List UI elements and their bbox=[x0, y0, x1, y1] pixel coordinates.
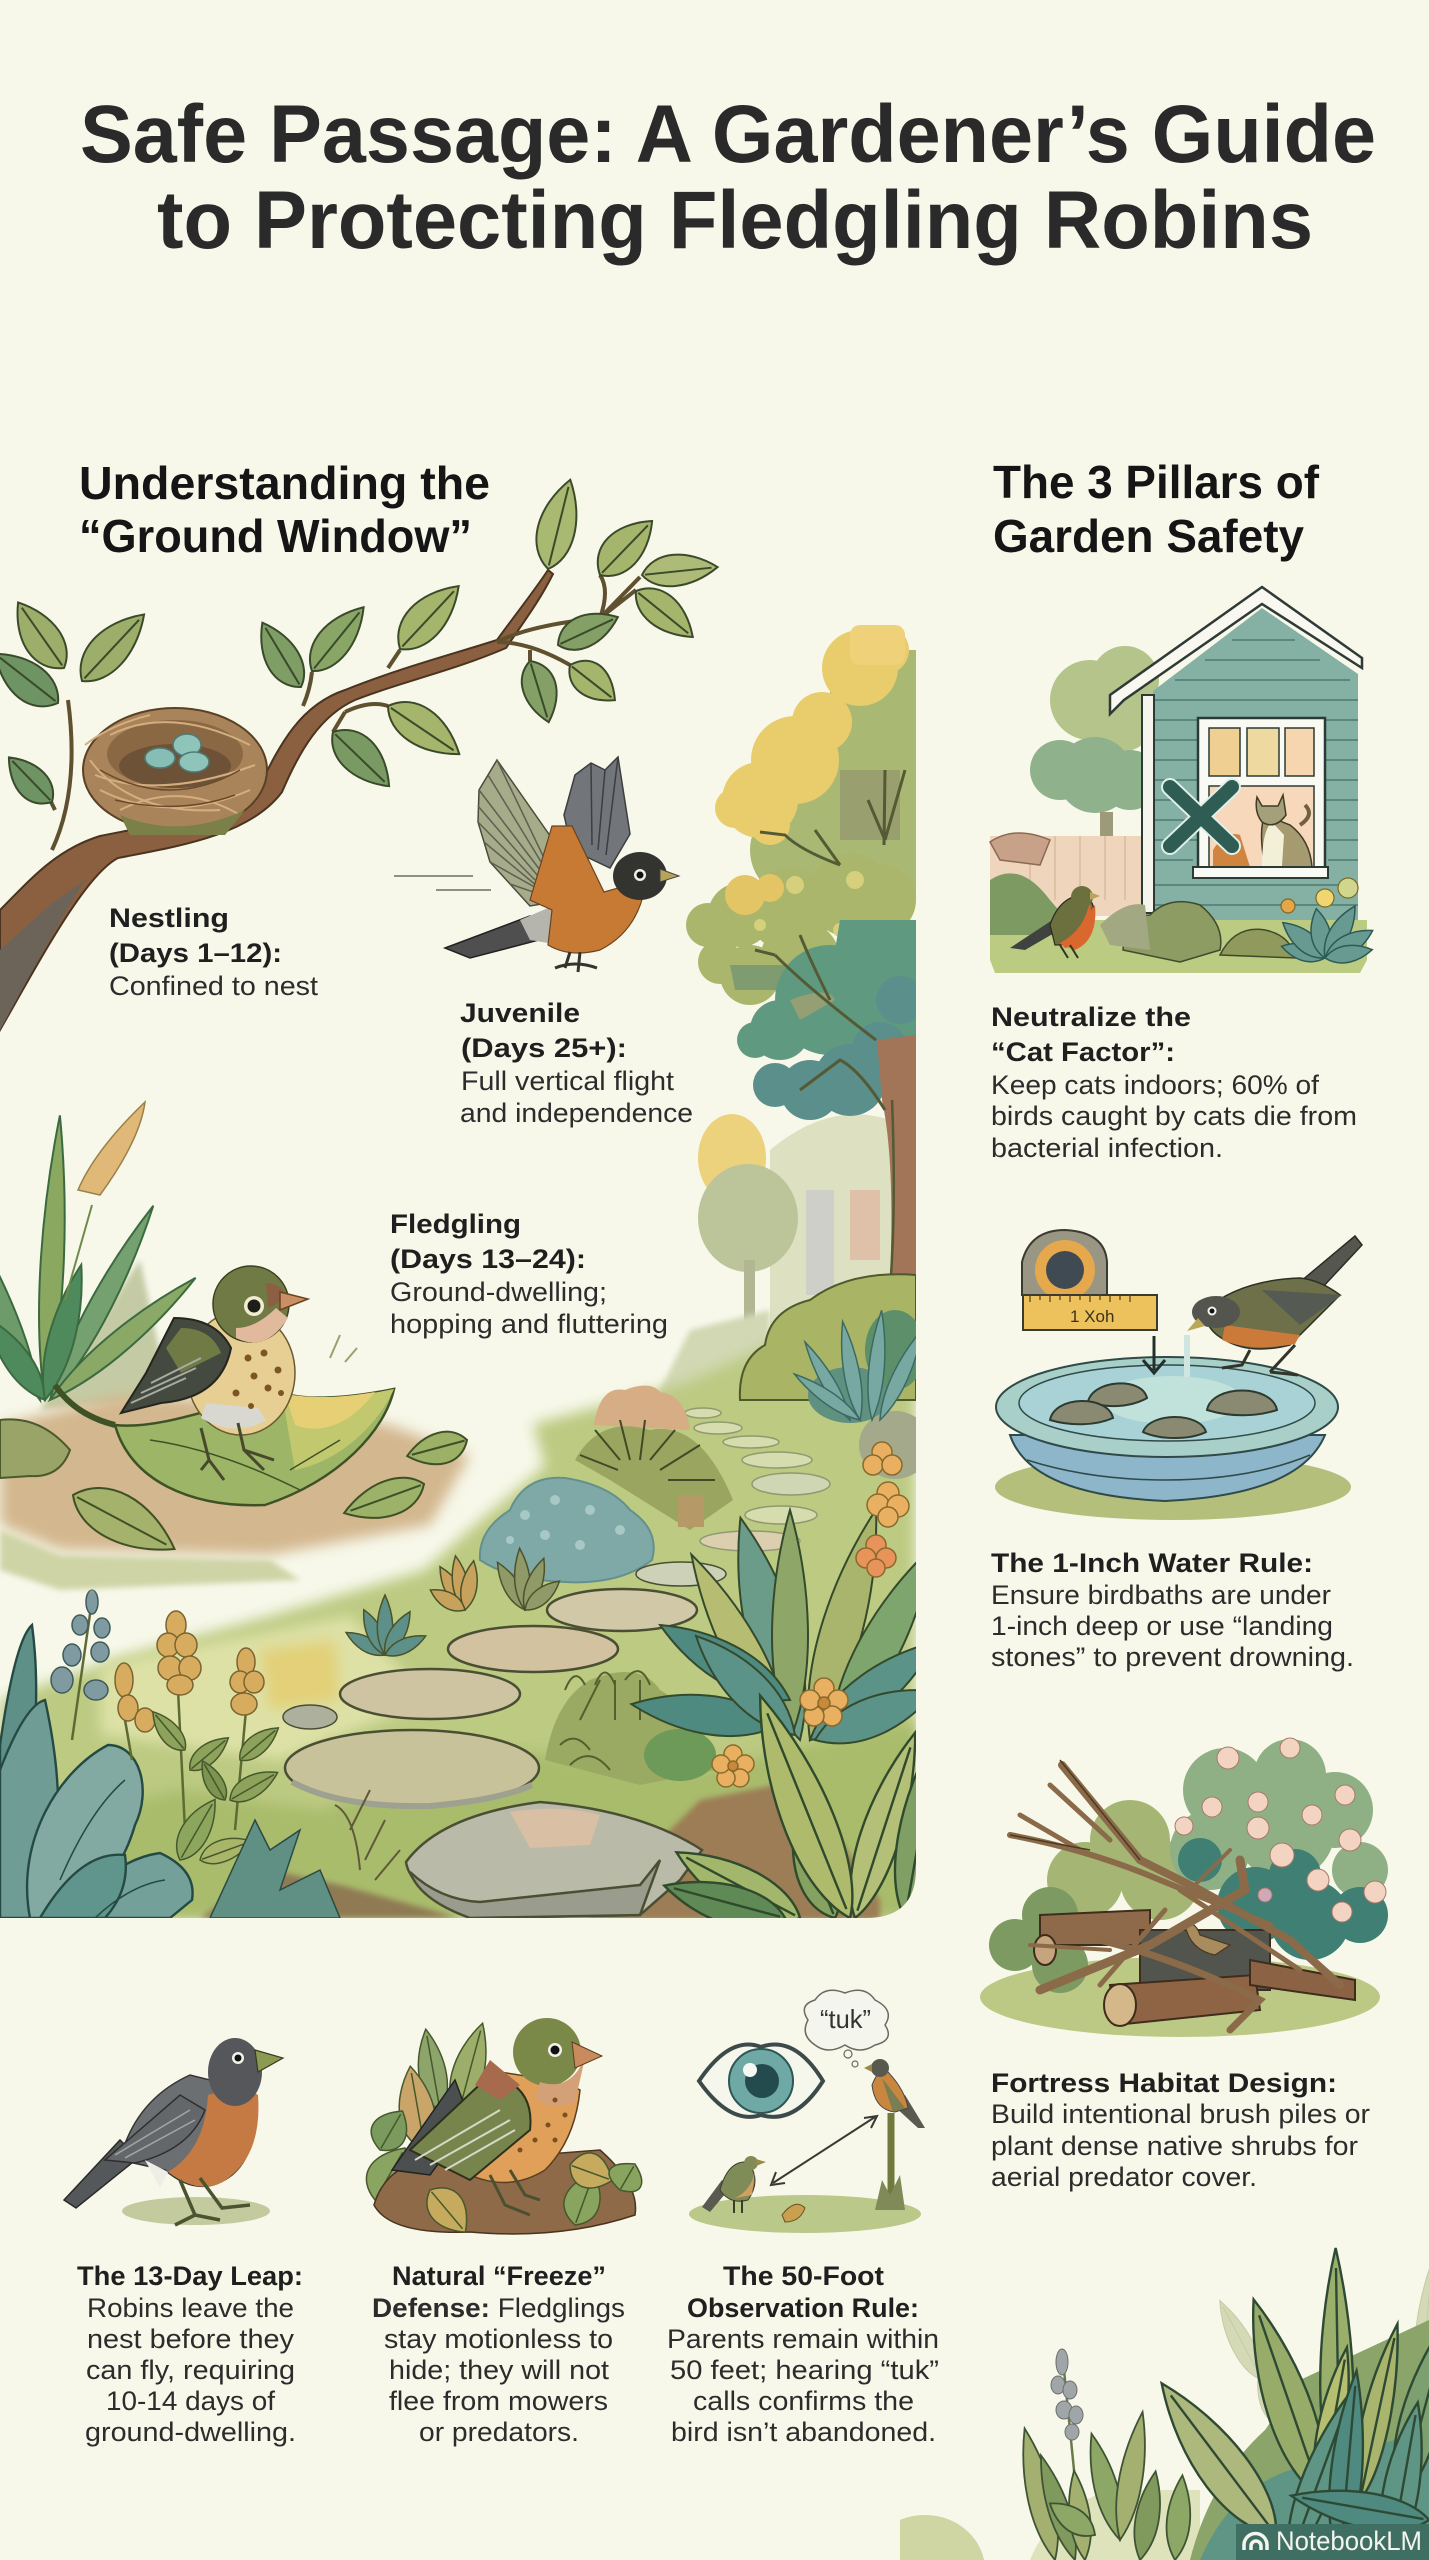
ground bbox=[980, 1957, 1380, 2037]
ground bbox=[689, 2195, 921, 2233]
dirt patch bbox=[0, 1395, 470, 1555]
heading: understanding the ground window bbox=[79, 457, 490, 562]
fledgling bbox=[702, 2156, 805, 2222]
text: cat factor: Keep cats indoors; 60% of bbox=[991, 1070, 1320, 1100]
text: freeze defense: flee from mowers bbox=[389, 2386, 608, 2416]
two-way arrow bbox=[771, 2116, 877, 2185]
text: freeze defense: stay motionless to bbox=[384, 2324, 613, 2354]
label: juvenile: Juvenile bbox=[460, 998, 580, 1028]
heading: three pillars: The 3 Pillars of bbox=[993, 456, 1320, 508]
heading: understanding the ground window: Understanding the bbox=[79, 457, 490, 509]
thin leaves bbox=[1012, 2410, 1194, 2560]
text: water rule: The 1-Inch Water Rule: bbox=[991, 1548, 1313, 1578]
text: observation rule: calls confirms the bbox=[693, 2386, 914, 2416]
label: juvenile bbox=[460, 998, 693, 1128]
fallen leaves bbox=[72, 1430, 468, 1551]
water bbox=[1019, 1365, 1315, 1441]
lawn bbox=[990, 920, 1367, 973]
landing stones bbox=[1050, 1383, 1277, 1438]
fledgling robin bbox=[121, 1266, 357, 1480]
text: water rule: Ensure birdbaths are under bbox=[991, 1580, 1331, 1610]
illustration: bottom-right foliage bbox=[865, 2248, 1429, 2560]
flowering shrub bbox=[1170, 1739, 1388, 1898]
background bush bbox=[740, 1274, 931, 1479]
perched parent robin bbox=[864, 2059, 925, 2128]
icon: freezing fledgling bbox=[357, 2018, 649, 2243]
icon: eye and observation bbox=[689, 1990, 925, 2233]
label: fledgling: (Days 13–24): bbox=[390, 1244, 586, 1274]
text: water rule: 1-inch deep or use “landing bbox=[991, 1611, 1333, 1641]
text: cat factor: bacterial infection. bbox=[991, 1133, 1223, 1163]
foliage underlay bbox=[1190, 2320, 1429, 2560]
text: fortress habitat: Fortress Habitat Design: bbox=[991, 2068, 1337, 2098]
text: 13-day leap bbox=[77, 2261, 303, 2447]
label: fledgling bbox=[390, 1209, 668, 1339]
illustration: brush pile and shrub bbox=[980, 1738, 1388, 2037]
basin bowl bbox=[1010, 1435, 1325, 1501]
shrubs bbox=[1123, 902, 1221, 962]
water stream bbox=[1184, 1335, 1190, 1377]
illustration: branch with nest bbox=[0, 475, 719, 1030]
flower stalks bbox=[51, 1590, 400, 1918]
tan and olive tufts bbox=[342, 1548, 564, 1661]
text: freeze defense: Defense: Fledglings bbox=[372, 2293, 625, 2323]
text: observation rule: bird isn’t abandoned. bbox=[671, 2417, 936, 2447]
illustration: garden scene panel bbox=[0, 625, 956, 1938]
orange dusty flowers and olive clump bbox=[575, 1385, 733, 1530]
text: 13-day leap: ground-dwelling. bbox=[85, 2417, 296, 2447]
back tree bbox=[1030, 646, 1160, 840]
blue shrub bbox=[480, 1478, 654, 1582]
mid grass cluster bbox=[545, 1671, 716, 1785]
heading: three pillars: Garden Safety bbox=[993, 510, 1304, 562]
left greenery bbox=[1047, 1800, 1200, 1920]
text: freeze defense bbox=[372, 2261, 625, 2447]
broad leaves bbox=[1160, 2248, 1429, 2524]
nest bbox=[83, 708, 267, 835]
label: nestling: (Days 1–12): bbox=[109, 938, 282, 968]
label: fledgling: hopping and fluttering bbox=[390, 1309, 668, 1339]
olive crown bbox=[750, 650, 916, 900]
giant leaf under fledgling bbox=[55, 1385, 394, 1505]
text: observation rule: Parents remain within bbox=[667, 2324, 939, 2354]
logs bbox=[1034, 1910, 1355, 2026]
robin on lawn bbox=[1010, 886, 1100, 958]
grass base bbox=[995, 1454, 1351, 1520]
lavender stalk bbox=[1051, 2349, 1083, 2480]
speech cloud: “tuk” bbox=[820, 2004, 871, 2034]
left grass plant bbox=[0, 1102, 203, 1410]
illustration: house with cats indoors bbox=[990, 587, 1377, 973]
house wall bbox=[1153, 608, 1358, 931]
text: 13-day leap: The 13-Day Leap: bbox=[77, 2261, 303, 2291]
large stones bbox=[283, 1562, 726, 1918]
text: cat factor: “Cat Factor”: bbox=[991, 1037, 1175, 1067]
basin rim bbox=[996, 1357, 1338, 1457]
text: fortress habitat: plant dense native shrubs for bbox=[991, 2131, 1358, 2161]
text: water rule: stones” to prevent drowning. bbox=[991, 1642, 1354, 1672]
stepping stones far bbox=[685, 1408, 830, 1551]
text: 13-day leap: nest before they bbox=[87, 2324, 295, 2354]
label: fledgling: Ground-dwelling; bbox=[390, 1277, 607, 1307]
cat bbox=[1256, 795, 1312, 867]
tape measure bbox=[1022, 1230, 1165, 1373]
text: 13-day leap: 10-14 days of bbox=[106, 2386, 276, 2416]
text: 13-day leap: can fly, requiring bbox=[86, 2355, 295, 2385]
window bbox=[1193, 718, 1328, 878]
label: juvenile: Full vertical flight bbox=[461, 1066, 675, 1096]
text: observation rule bbox=[667, 2261, 939, 2447]
text: water rule bbox=[991, 1548, 1354, 1672]
green and teal layer bbox=[737, 920, 935, 1060]
small bird in pile bbox=[1185, 1924, 1230, 1955]
eye bbox=[699, 2045, 823, 2117]
ground bbox=[0, 1345, 916, 1918]
text: freeze defense: hide; they will not bbox=[389, 2355, 610, 2385]
yellow foliage bbox=[715, 626, 909, 845]
label: nestling bbox=[109, 903, 319, 1001]
text: fortress habitat: Build intentional brush piles or bbox=[991, 2099, 1370, 2129]
text: observation rule: The 50-Foot bbox=[723, 2261, 884, 2291]
text: freeze defense: Natural “Freeze” bbox=[392, 2261, 606, 2291]
text: freeze defense: or predators. bbox=[419, 2417, 579, 2447]
fence bbox=[990, 836, 1142, 916]
title: Safe Passage: A Gardener’s Guide bbox=[80, 89, 1376, 180]
logo: NotebookLM: NotebookLM bbox=[1276, 2526, 1422, 2556]
icon: adult robin standing bbox=[64, 2038, 283, 2225]
text: 13-day leap: Robins leave the bbox=[87, 2293, 294, 2323]
text: cat factor: birds caught by cats die from bbox=[991, 1101, 1357, 1131]
heading: three pillars bbox=[993, 456, 1320, 562]
leaves bbox=[0, 475, 719, 814]
spiky flowering plant bbox=[1277, 901, 1377, 966]
speech cloud bbox=[804, 1990, 888, 2067]
text: cat factor bbox=[991, 1002, 1357, 1163]
tape measure: 1 Xoh bbox=[1070, 1307, 1114, 1326]
red x mark bbox=[1170, 787, 1232, 846]
text: fortress habitat: aerial predator cover. bbox=[991, 2162, 1257, 2192]
heading: understanding the ground window: “Ground Window” bbox=[79, 510, 472, 562]
title: to Protecting Fledgling Robins bbox=[157, 175, 1313, 266]
post bbox=[888, 2113, 894, 2205]
distant haze and trees bbox=[658, 1114, 892, 1394]
tree canopy bbox=[686, 625, 935, 1120]
drinking robin bbox=[1187, 1236, 1362, 1375]
text: cat factor: Neutralize the bbox=[991, 1002, 1191, 1032]
title bbox=[80, 89, 1376, 266]
branch bbox=[0, 570, 640, 1030]
text: fortress habitat bbox=[991, 2068, 1370, 2192]
label: juvenile: (Days 25+): bbox=[461, 1033, 627, 1063]
spiky teal plant bbox=[792, 1310, 916, 1422]
label: nestling: Nestling bbox=[109, 903, 229, 933]
roof bbox=[1110, 587, 1362, 714]
crossed branches bbox=[1010, 1765, 1340, 2030]
logo backing bbox=[1236, 2524, 1429, 2560]
foreground right leaves bbox=[662, 1692, 916, 1918]
tree trunk and branches bbox=[755, 770, 916, 1280]
label: nestling: Confined to nest bbox=[109, 971, 319, 1001]
right spiky plant bbox=[629, 1506, 916, 1744]
text: observation rule: 50 feet; hearing “tuk” bbox=[670, 2355, 939, 2385]
illustration: bird bath and tape measure bbox=[995, 1230, 1362, 1520]
icon: flying juvenile robin bbox=[394, 757, 679, 972]
left foreground teal leaves bbox=[0, 1625, 193, 1918]
orange flowers bbox=[712, 1442, 909, 1787]
label: juvenile: and independence bbox=[460, 1098, 693, 1128]
second olive layer bbox=[686, 853, 916, 1005]
label: fledgling: Fledgling bbox=[390, 1209, 521, 1239]
text: observation rule: Observation Rule: bbox=[687, 2293, 919, 2323]
